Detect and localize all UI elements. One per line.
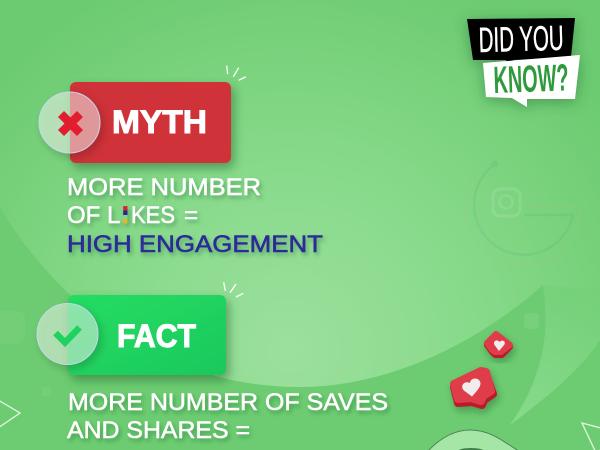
- icon: large heart bubble: [454, 371, 493, 405]
- decorative triangle right: [582, 423, 600, 450]
- faint instagram and gauge watermark: [465, 160, 581, 266]
- myth statement text: OF L: [67, 202, 120, 229]
- myth statement text: MORE NUMBER: [67, 174, 261, 201]
- myth statement text: KES: [131, 202, 175, 229]
- myth statement text: HIGH ENGAGEMENT: [67, 231, 323, 258]
- myth statement text: I: [122, 202, 129, 229]
- fact green card: [68, 295, 226, 375]
- fact statement text: [67, 389, 388, 444]
- fact sparkle ticks: [224, 282, 243, 297]
- myth sparkle ticks: [227, 66, 246, 80]
- panel: myth: [39, 66, 246, 163]
- icon: glass circle: [39, 92, 100, 153]
- bottom cropped circle shape: [427, 430, 520, 450]
- icon: green check: [56, 328, 80, 342]
- icon: small heart bubble: [487, 334, 510, 355]
- icon: red cross: [61, 114, 80, 133]
- myth red card: [70, 82, 231, 163]
- decorative triangle left: [0, 400, 20, 428]
- panel: fact: [37, 282, 243, 375]
- myth statement text: [67, 174, 323, 258]
- did you know badge: [467, 18, 580, 107]
- myth label: MYTH: [112, 104, 207, 140]
- myth statement text: =: [184, 202, 198, 229]
- icon: glass circle: [37, 304, 98, 364]
- fact statement text: MORE NUMBER OF SAVES: [68, 389, 388, 416]
- fact label: FACT: [117, 318, 196, 354]
- fact statement text: AND SHARES =: [67, 417, 250, 444]
